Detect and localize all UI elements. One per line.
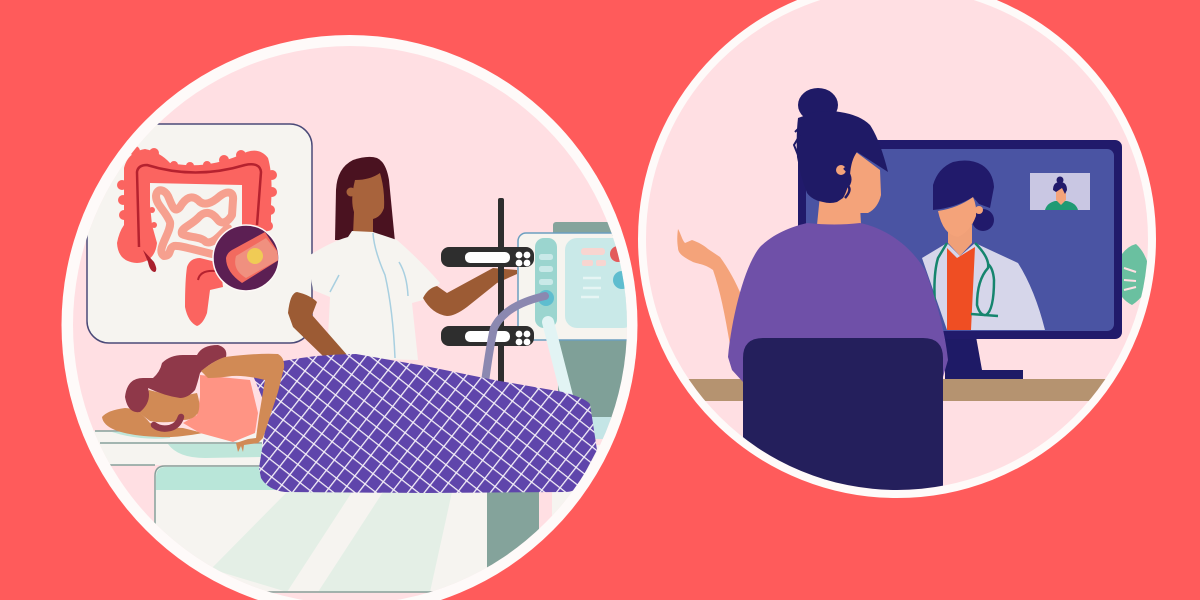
bed body xyxy=(155,466,487,591)
patient sweater xyxy=(728,223,948,382)
mint sheet xyxy=(168,444,262,458)
doctor shirt xyxy=(947,247,975,330)
light rays xyxy=(211,492,352,592)
IV pole xyxy=(441,198,534,383)
icon: small intestine xyxy=(156,190,233,256)
icon: appendix xyxy=(143,250,156,272)
bed top band xyxy=(156,467,276,490)
pole bracket upper xyxy=(441,247,534,267)
patient neck xyxy=(817,195,861,225)
desk xyxy=(640,379,1160,401)
bed floor line xyxy=(266,591,433,593)
patient torso xyxy=(183,375,258,442)
icon: plant leaf xyxy=(1122,244,1150,305)
machine body xyxy=(517,232,627,341)
bed edge line xyxy=(154,465,260,524)
patient raised arm and hand xyxy=(677,229,742,345)
patient hair xyxy=(125,345,226,412)
machine top xyxy=(553,222,612,236)
patient hair xyxy=(797,111,888,203)
figure: doctor xyxy=(922,161,1045,330)
ventilator machine xyxy=(517,222,627,439)
panel: hospital procedure circle xyxy=(60,35,643,600)
figure: nurse xyxy=(288,157,517,360)
bed side xyxy=(552,445,600,516)
buttons xyxy=(610,246,620,262)
bed column xyxy=(487,492,539,568)
chair xyxy=(743,338,943,490)
hair strand xyxy=(154,417,181,429)
figure: patient xyxy=(102,345,258,442)
patient head xyxy=(138,390,199,422)
nurse left arm xyxy=(288,292,348,356)
hair wisps xyxy=(794,125,802,155)
nurse hair xyxy=(335,157,395,242)
doctor neck xyxy=(948,225,972,256)
colon inner line xyxy=(137,164,261,247)
hospital bed xyxy=(94,430,600,593)
monitor xyxy=(798,140,1122,379)
stethoscope xyxy=(934,243,998,316)
doctor hair xyxy=(933,161,994,210)
panel: telehealth circle xyxy=(640,0,1160,494)
doctor ear xyxy=(975,206,983,214)
machine base xyxy=(558,340,628,418)
nurse right arm xyxy=(423,268,517,316)
doctor coat xyxy=(922,243,1045,330)
thumbnail person xyxy=(1045,176,1078,210)
breathing tubes xyxy=(485,296,568,400)
video thumbnail xyxy=(1030,173,1090,210)
bed upper mat xyxy=(94,431,264,465)
screen xyxy=(565,238,627,328)
nurse ear xyxy=(346,188,354,196)
icon: sigmoid colon xyxy=(185,258,223,326)
blanket xyxy=(252,354,597,493)
monitor stand xyxy=(945,331,1023,379)
patient ear xyxy=(836,165,846,175)
patient lower arm xyxy=(102,408,203,437)
doctor face xyxy=(938,197,976,237)
figure: patient at desk xyxy=(677,88,948,490)
coat seams xyxy=(330,233,408,358)
sigmoid inner line xyxy=(198,271,215,280)
patient face xyxy=(820,152,881,213)
patient bun xyxy=(798,88,838,122)
patient arm over blanket xyxy=(201,354,284,452)
pole bracket lower xyxy=(441,326,534,346)
pillow xyxy=(112,432,170,439)
panel: anatomy poster xyxy=(87,124,312,343)
control strip xyxy=(535,238,557,328)
nurse neck and face xyxy=(352,173,384,235)
icon: large intestine xyxy=(117,146,277,263)
monitor screen xyxy=(806,149,1114,331)
icon: magnifier with polyp xyxy=(213,225,282,291)
hair curl xyxy=(844,168,850,198)
doctor bun xyxy=(972,209,994,231)
nurse coat xyxy=(307,231,440,360)
